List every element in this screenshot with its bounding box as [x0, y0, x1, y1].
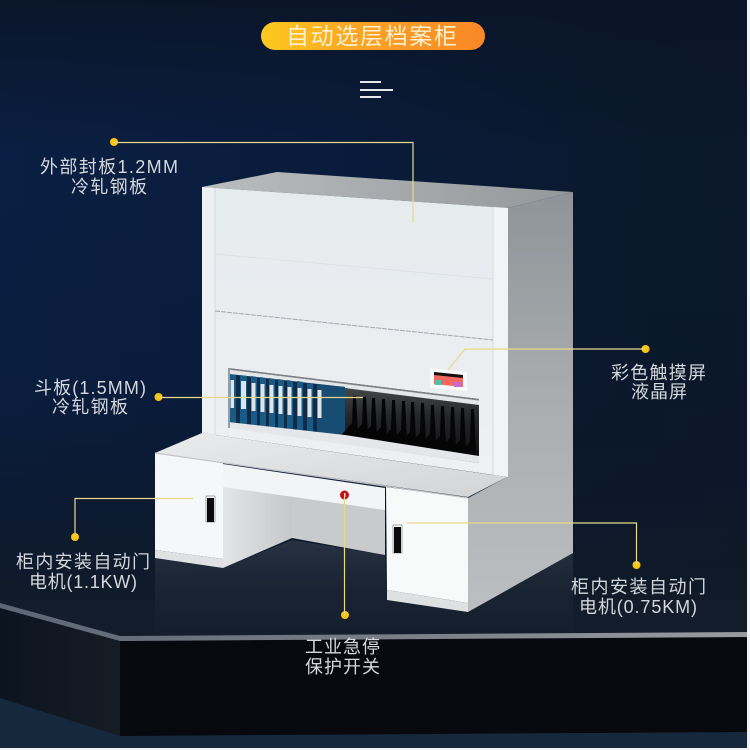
callout: right door motor: 柜内安装自动门 [571, 577, 706, 597]
callout: right door motor [407, 523, 706, 617]
left pedestal cabinet [155, 453, 223, 568]
callout: touch screen [448, 345, 706, 402]
filing cabinet [155, 172, 573, 612]
callout: outer panel: 冷轧钢板 [71, 177, 147, 197]
icon: menu lines [360, 81, 393, 98]
drawer [223, 464, 385, 510]
display stage platform [0, 540, 750, 750]
callout: right door motor: 电机(0.75KM) [579, 597, 697, 617]
callout: drawer plate: 冷轧钢板 [52, 397, 128, 417]
touch screen panel [430, 368, 467, 391]
desk front edge [155, 453, 468, 498]
callout: left door motor: 柜内安装自动门 [16, 552, 150, 572]
books [229, 374, 345, 436]
shelf opening with books and slots [228, 368, 479, 463]
callout: drawer plate: 斗板(1.5MM) [34, 378, 146, 398]
callout: left door motor: 电机(1.1KW) [29, 572, 137, 592]
right pedestal cabinet [386, 487, 468, 612]
kneehole recess [223, 480, 385, 568]
hanging slots [337, 396, 476, 458]
cabinet front face [202, 187, 508, 477]
callout: emergency stop: 保护开关 [305, 657, 380, 677]
icon: emergency stop button [340, 490, 349, 500]
callout: outer panel: 外部封板1.2MM [40, 157, 178, 177]
callout: drawer plate [34, 378, 363, 417]
cabinet top face [202, 172, 573, 208]
title badge: 自动选层档案柜 [286, 23, 457, 49]
cabinet side face [468, 192, 573, 612]
callout: emergency stop: 工业急停 [305, 637, 380, 657]
callout: emergency stop [305, 497, 380, 677]
desk top surface [155, 433, 507, 497]
callout: touch screen: 彩色触摸屏 [611, 363, 706, 383]
callout: touch screen: 液晶屏 [631, 382, 687, 402]
callout: left door motor [16, 498, 193, 592]
callout: outer panel [40, 138, 413, 223]
